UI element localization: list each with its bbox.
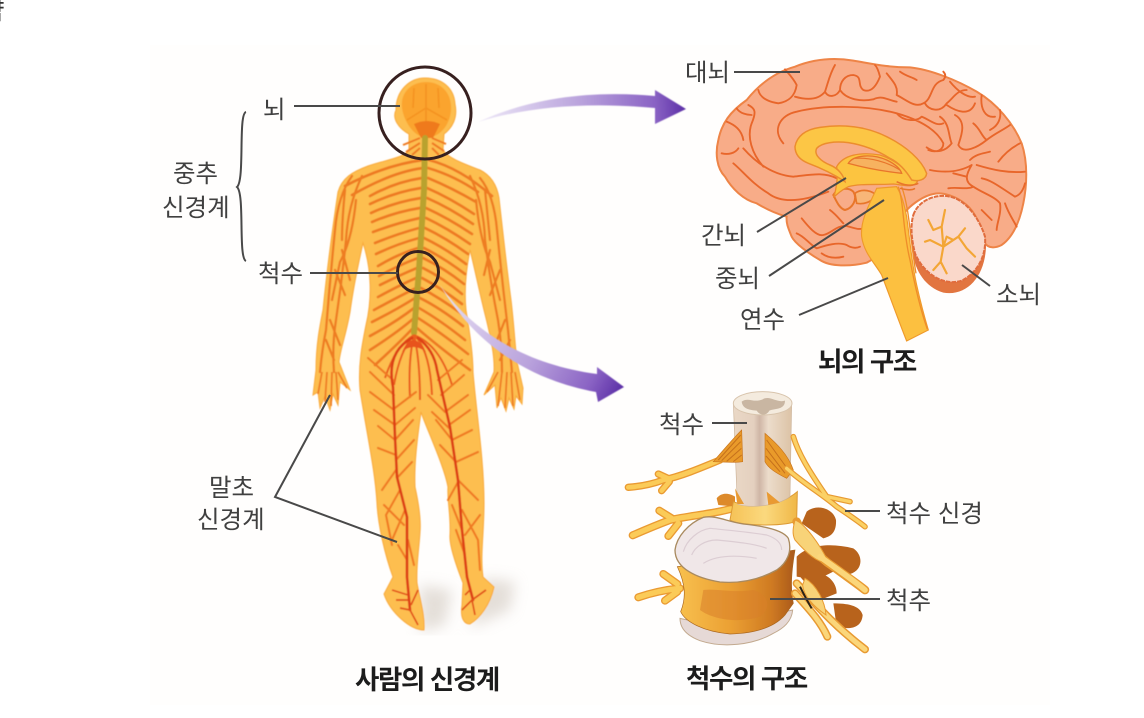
labels: central nervous system: 신경계	[162, 194, 230, 222]
circle: spinal cord highlight	[398, 252, 438, 292]
corpus callosum	[795, 126, 927, 182]
lower-left nerve	[638, 574, 680, 601]
labels: central nervous system: 뇌	[263, 96, 286, 124]
labels: spinal parts: 척수 신경	[886, 500, 983, 528]
labels: peripheral nervous system: 신경계	[197, 506, 265, 534]
dura ring	[730, 492, 797, 525]
brain in head	[402, 82, 451, 138]
upper disc	[675, 517, 790, 582]
midbrain folds	[897, 182, 918, 190]
right lower nerve	[795, 583, 865, 649]
labels: brain parts: 대뇌	[685, 59, 730, 87]
human nervous system figure	[313, 78, 523, 632]
labels: brain parts: 소뇌	[996, 281, 1041, 309]
main leg nerves	[392, 338, 473, 610]
cord top section	[733, 392, 792, 415]
right upper nerves	[787, 437, 865, 527]
neck nerves	[403, 138, 446, 155]
foot nerves	[392, 590, 486, 625]
foot shadow	[420, 578, 515, 632]
stem side stripe	[898, 187, 927, 329]
labels: spinal parts	[659, 411, 983, 615]
labels: peripheral nervous system: 말초	[209, 474, 254, 502]
root cones	[735, 488, 780, 505]
labels: peripheral nervous system	[197, 474, 265, 534]
leg branches	[368, 358, 480, 570]
buttock fan	[385, 335, 452, 400]
background panel	[150, 45, 1050, 705]
cerebrum folds	[722, 65, 1025, 258]
labels: brain parts: 간뇌	[701, 222, 746, 250]
labels: brain parts	[685, 59, 1041, 334]
circle: brain highlight	[379, 67, 471, 159]
labels: brain parts: 연수	[740, 307, 785, 334]
spinal structure diagram	[628, 392, 865, 649]
fornix loop	[848, 156, 902, 173]
vertebra body	[677, 550, 795, 634]
title: human nervous system: 사람의 신경계	[355, 665, 499, 695]
spinal cord	[414, 138, 425, 333]
dark groove	[800, 587, 812, 608]
lower disc	[680, 610, 793, 645]
labels: spinal parts: 척수	[659, 411, 704, 439]
left fan	[713, 430, 743, 462]
right middle nerve	[797, 522, 865, 590]
spinal cord column	[733, 403, 792, 506]
arrow: body to brain	[478, 90, 686, 124]
labels: spinal parts: 척추	[886, 587, 931, 615]
brain diagram	[717, 59, 1026, 341]
vertebra speckle	[700, 590, 767, 620]
arbor vitae	[925, 210, 975, 273]
cerebrum outline	[717, 59, 1026, 265]
brain stem	[861, 187, 928, 341]
leader lines	[237, 72, 990, 599]
labels: central nervous system	[162, 96, 303, 288]
disc rings	[683, 528, 782, 563]
labels: brain parts: 중뇌	[715, 265, 760, 293]
middle-left nerve	[633, 506, 740, 536]
cerebellum shadow	[912, 217, 986, 293]
hypothalamus loops	[833, 189, 855, 210]
hand nerves	[318, 372, 520, 408]
spinal processes	[797, 508, 863, 628]
rib nerves left	[345, 160, 423, 365]
labels: central nervous system: 척수	[258, 260, 303, 288]
cerebellum	[912, 196, 985, 282]
labels: central nervous system: 중추	[173, 161, 218, 188]
title: spinal structure: 척수의 구조	[686, 664, 808, 694]
thalamus block	[834, 154, 917, 197]
arrow: body to spinal structure	[440, 285, 624, 402]
nerve root bump	[717, 494, 735, 507]
rib nerves right	[417, 160, 492, 370]
upper-left nerve	[628, 460, 720, 491]
arm nerves	[320, 176, 512, 372]
body silhouette	[313, 78, 523, 630]
right fan	[765, 433, 793, 478]
title: brain structure: 뇌의 구조	[818, 347, 917, 377]
